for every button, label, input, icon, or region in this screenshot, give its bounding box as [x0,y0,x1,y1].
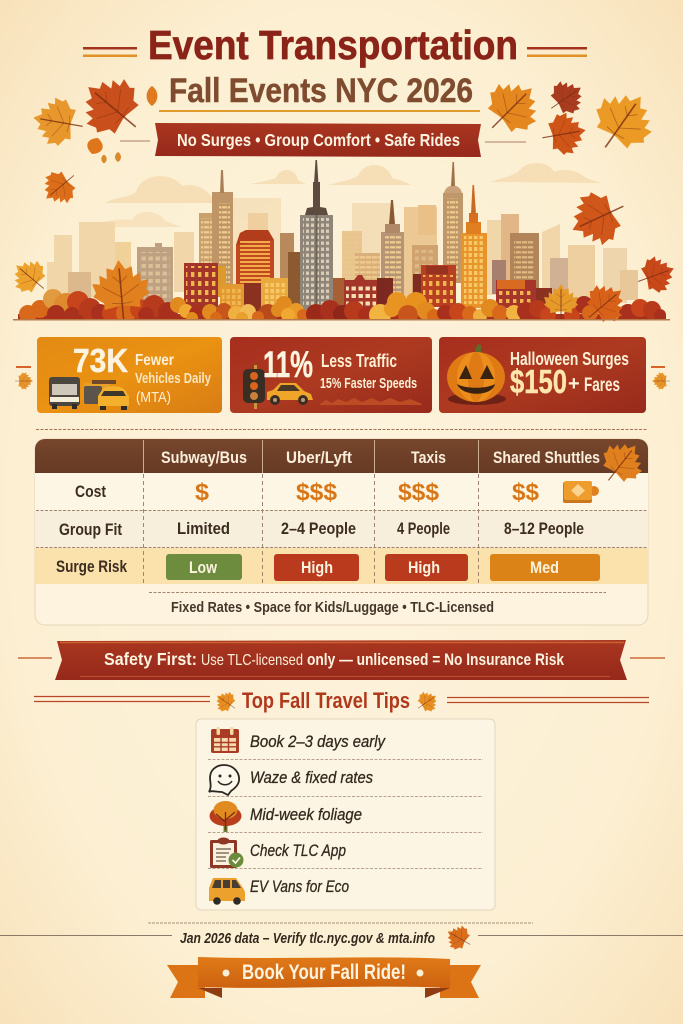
call to action ribbon [167,957,481,998]
near buildings [184,160,552,313]
card: Halloween surges: Halloween Surges [510,349,629,369]
table body [35,439,648,625]
small leaf [101,154,107,164]
title: Event Transportation [148,22,518,68]
pill: high [385,554,468,581]
leaf [29,95,87,149]
leaf [35,162,85,212]
stat cards [15,337,670,413]
leaf [412,687,442,717]
falling leaves [29,65,665,254]
mid buildings [68,162,568,310]
call to action ribbon: Book Your Fall Ride! [242,961,406,984]
pill: med [490,554,600,581]
leaf [5,252,55,302]
skyline illustration [5,160,680,333]
tip: TLC app [210,838,346,868]
leaf [442,921,476,955]
leaf [542,74,590,122]
subtitle underline [159,110,480,112]
row backgrounds [35,473,648,584]
tip: TLC app: Check TLC App [250,841,346,860]
row: group fit: 2–4 People [281,519,356,538]
row: cost: $$ [512,479,540,506]
card: 73K fewer vehicles: 73K [73,342,128,379]
small leaf [147,86,157,106]
comparison table [35,433,652,625]
panel: tips [196,719,495,910]
tip: foliage [210,801,362,832]
icon: waze face [209,765,239,795]
header row: Shared Shuttles [493,448,600,467]
tip: book early: Book 2–3 days early [250,732,386,751]
leaf [562,182,634,254]
foliage [18,289,666,319]
icon: pumpkin [447,344,506,405]
header [83,22,587,157]
row: group fit [59,519,584,539]
tip: EV vans: EV Vans for Eco [250,877,349,896]
card: 11% less traffic: 15% Faster Speeds [320,375,417,392]
icon: autumn tree [210,801,242,832]
pill: med: Med [530,558,559,577]
leaf [544,284,578,320]
card: 73K fewer vehicles: Vehicles Daily [135,370,211,387]
icon: traffic light [243,365,265,409]
row: group fit: 4 People [397,519,450,538]
safety banner: only — unlicensed = No Insurance Risk [307,651,565,669]
header row: Taxis [411,448,446,467]
clouds [82,163,601,227]
heading text: Top Fall Travel Tips [242,688,410,713]
card: 11% less traffic [230,337,432,413]
icon: bus and car [49,377,129,410]
pill: high: High [408,558,440,577]
row: cost: $ [195,479,210,506]
row: cost: $$$ [398,479,440,506]
leaf [474,70,550,146]
safety banner [18,640,665,680]
source note: Jan 2026 data – Verify tlc.nyc.gov & mta.info [180,930,435,947]
card: Halloween surges [439,337,646,413]
leaf [592,433,652,493]
title rules [83,47,587,57]
row: cost [75,479,599,506]
tip: foliage: Mid-week foliage [250,805,362,824]
row: group fit: Group Fit [59,520,122,539]
row: surge risk: Surge Risk [56,557,127,576]
ground line [13,319,670,320]
leaf [632,252,680,298]
tip: book early [211,727,386,753]
header row: Uber/Lyft [286,448,352,467]
safety banner: Use TLC-licensed [201,652,303,669]
header row [35,439,648,473]
row: group fit: Limited [177,519,230,538]
tip: EV vans [209,877,349,905]
card: 11% less traffic: Less Traffic [321,351,397,371]
leaf [90,258,152,322]
row: cost: $$$ [296,479,338,506]
header row: Subway/Bus [161,448,247,467]
pill: high: High [301,558,333,577]
tip: waze: Waze & fixed rates [250,768,373,787]
card: 73K fewer vehicles: (MTA) [136,389,171,406]
side leaf left [15,366,33,389]
leaf [211,687,241,717]
pill: low: Low [189,558,218,577]
card: 73K fewer vehicles: Fewer [135,352,174,369]
icon: clipboard [210,838,244,868]
icon: ticket [563,481,599,503]
leaf [539,110,589,158]
tips heading [34,687,649,717]
leaf [70,65,154,149]
row: cost: Cost [75,482,106,501]
icon: orange car [267,383,313,405]
row: surge risk [56,554,600,581]
pill: high [274,554,359,581]
table footnote: Fixed Rates • Space for Kids/Luggage • TLC-Licensed [171,599,494,616]
row: group fit: 8–12 People [504,519,584,538]
subtitle: Fall Events NYC 2026 [169,72,473,110]
card: 11% less traffic: 11% [263,344,313,385]
card: Halloween surges: $150 [510,363,567,400]
card: Halloween surges: Fares [584,375,620,396]
leaf [576,275,634,333]
card: 73K fewer vehicles [37,337,222,413]
distant buildings [47,198,638,303]
safety banner: Safety First: [104,649,197,669]
pill: low [166,554,242,580]
side leaf right [651,366,670,389]
icon: calendar [211,727,239,753]
tagline banner [120,123,526,157]
card: Halloween surges: + [568,373,580,395]
small leaf [85,135,105,157]
icon: van [209,878,245,905]
leaf [581,80,665,164]
tagline banner: No Surges • Group Comfort • Safe Rides [177,130,460,150]
footer [0,921,683,955]
tip: waze [209,765,373,795]
small leaf [115,152,121,162]
